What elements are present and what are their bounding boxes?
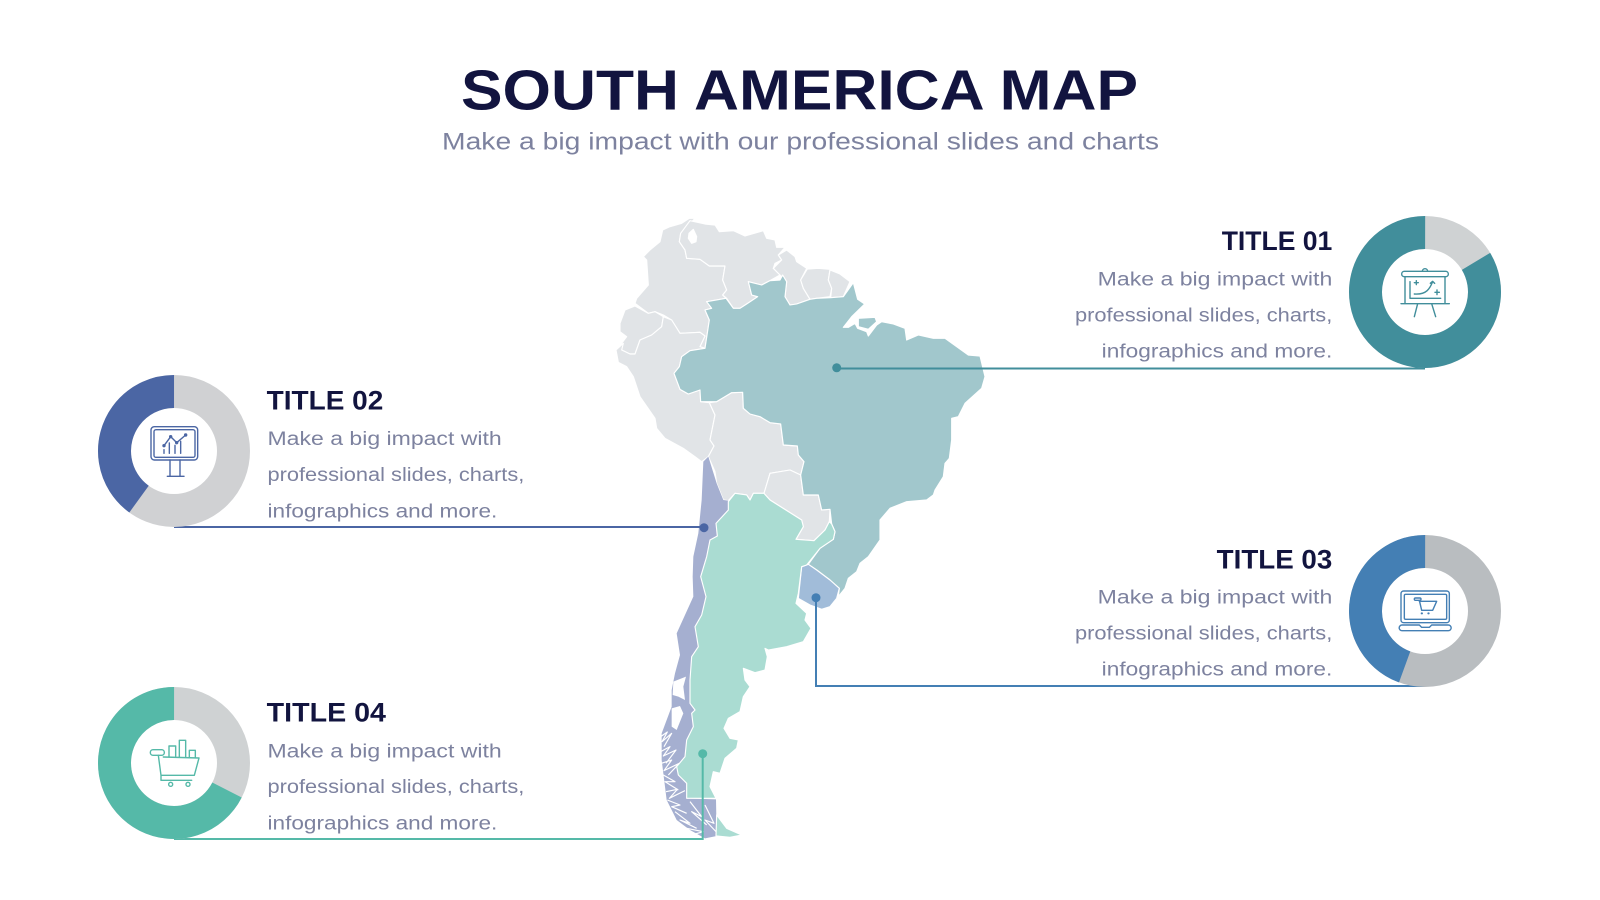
country: Chile bbox=[661, 457, 728, 838]
country: French Guiana bbox=[828, 270, 850, 298]
heading: title 04: TITLE 04 bbox=[267, 697, 386, 727]
text block: title 03: Make a big impact with bbox=[1098, 586, 1332, 608]
text block: title 04: professional slides, charts, bbox=[268, 776, 524, 798]
donut: title 02 bbox=[91, 368, 257, 534]
country: Suriname bbox=[801, 268, 832, 299]
island: Tierra del Fuego bbox=[716, 815, 742, 837]
country: Colombia bbox=[635, 218, 727, 348]
connector line: title 01 bbox=[832, 363, 1425, 372]
icon: shopping cart with bars bbox=[150, 740, 199, 786]
text block: title 04: Make a big impact with bbox=[268, 741, 502, 763]
country: Ecuador bbox=[620, 306, 663, 354]
country: Venezuela bbox=[679, 221, 785, 308]
text block: title 01 bbox=[1075, 226, 1332, 363]
country: Paraguay bbox=[764, 470, 830, 541]
country: Bolivia bbox=[708, 392, 804, 501]
map: South America bbox=[616, 218, 985, 838]
donut: title 04 bbox=[94, 683, 254, 843]
country: Peru bbox=[616, 317, 715, 462]
text block: title 02: Make a big impact with bbox=[268, 428, 502, 450]
donut: title 01 bbox=[1343, 210, 1507, 374]
connector line: title 03 bbox=[812, 593, 1425, 686]
heading: title 03: TITLE 03 bbox=[1217, 544, 1332, 574]
text block: title 03 bbox=[1075, 544, 1332, 681]
text block: title 02: professional slides, charts, bbox=[268, 464, 524, 486]
icon: presentation board bbox=[1401, 269, 1449, 317]
title: SOUTH AMERICA MAP bbox=[461, 58, 1138, 122]
text block: title 03: infographics and more. bbox=[1102, 659, 1332, 681]
connector line: title 02 bbox=[174, 523, 708, 532]
subtitle: Make a big impact with our professional slides and charts bbox=[442, 129, 1159, 155]
text block: title 01: Make a big impact with bbox=[1098, 269, 1332, 291]
heading: title 01: TITLE 01 bbox=[1222, 226, 1332, 256]
text block: title 02 bbox=[267, 385, 524, 522]
icon: chart monitor bbox=[151, 427, 198, 476]
donut: title 03 bbox=[1349, 535, 1501, 687]
text block: title 03: professional slides, charts, bbox=[1075, 622, 1332, 644]
country: Brazil bbox=[674, 275, 985, 597]
country: Argentina bbox=[677, 493, 835, 798]
text block: title 04 bbox=[267, 697, 524, 834]
text block: title 02: infographics and more. bbox=[268, 500, 497, 522]
country: Uruguay bbox=[798, 564, 839, 609]
heading: title 02: TITLE 02 bbox=[267, 385, 383, 415]
island: Marajo bbox=[858, 317, 877, 329]
connector line: title 04 bbox=[174, 749, 707, 839]
icon: laptop with cart bbox=[1399, 591, 1451, 631]
text block: title 01: infographics and more. bbox=[1102, 341, 1332, 363]
text block: title 01: professional slides, charts, bbox=[1075, 305, 1332, 327]
country: Guyana bbox=[773, 250, 810, 305]
text block: title 04: infographics and more. bbox=[268, 812, 497, 834]
